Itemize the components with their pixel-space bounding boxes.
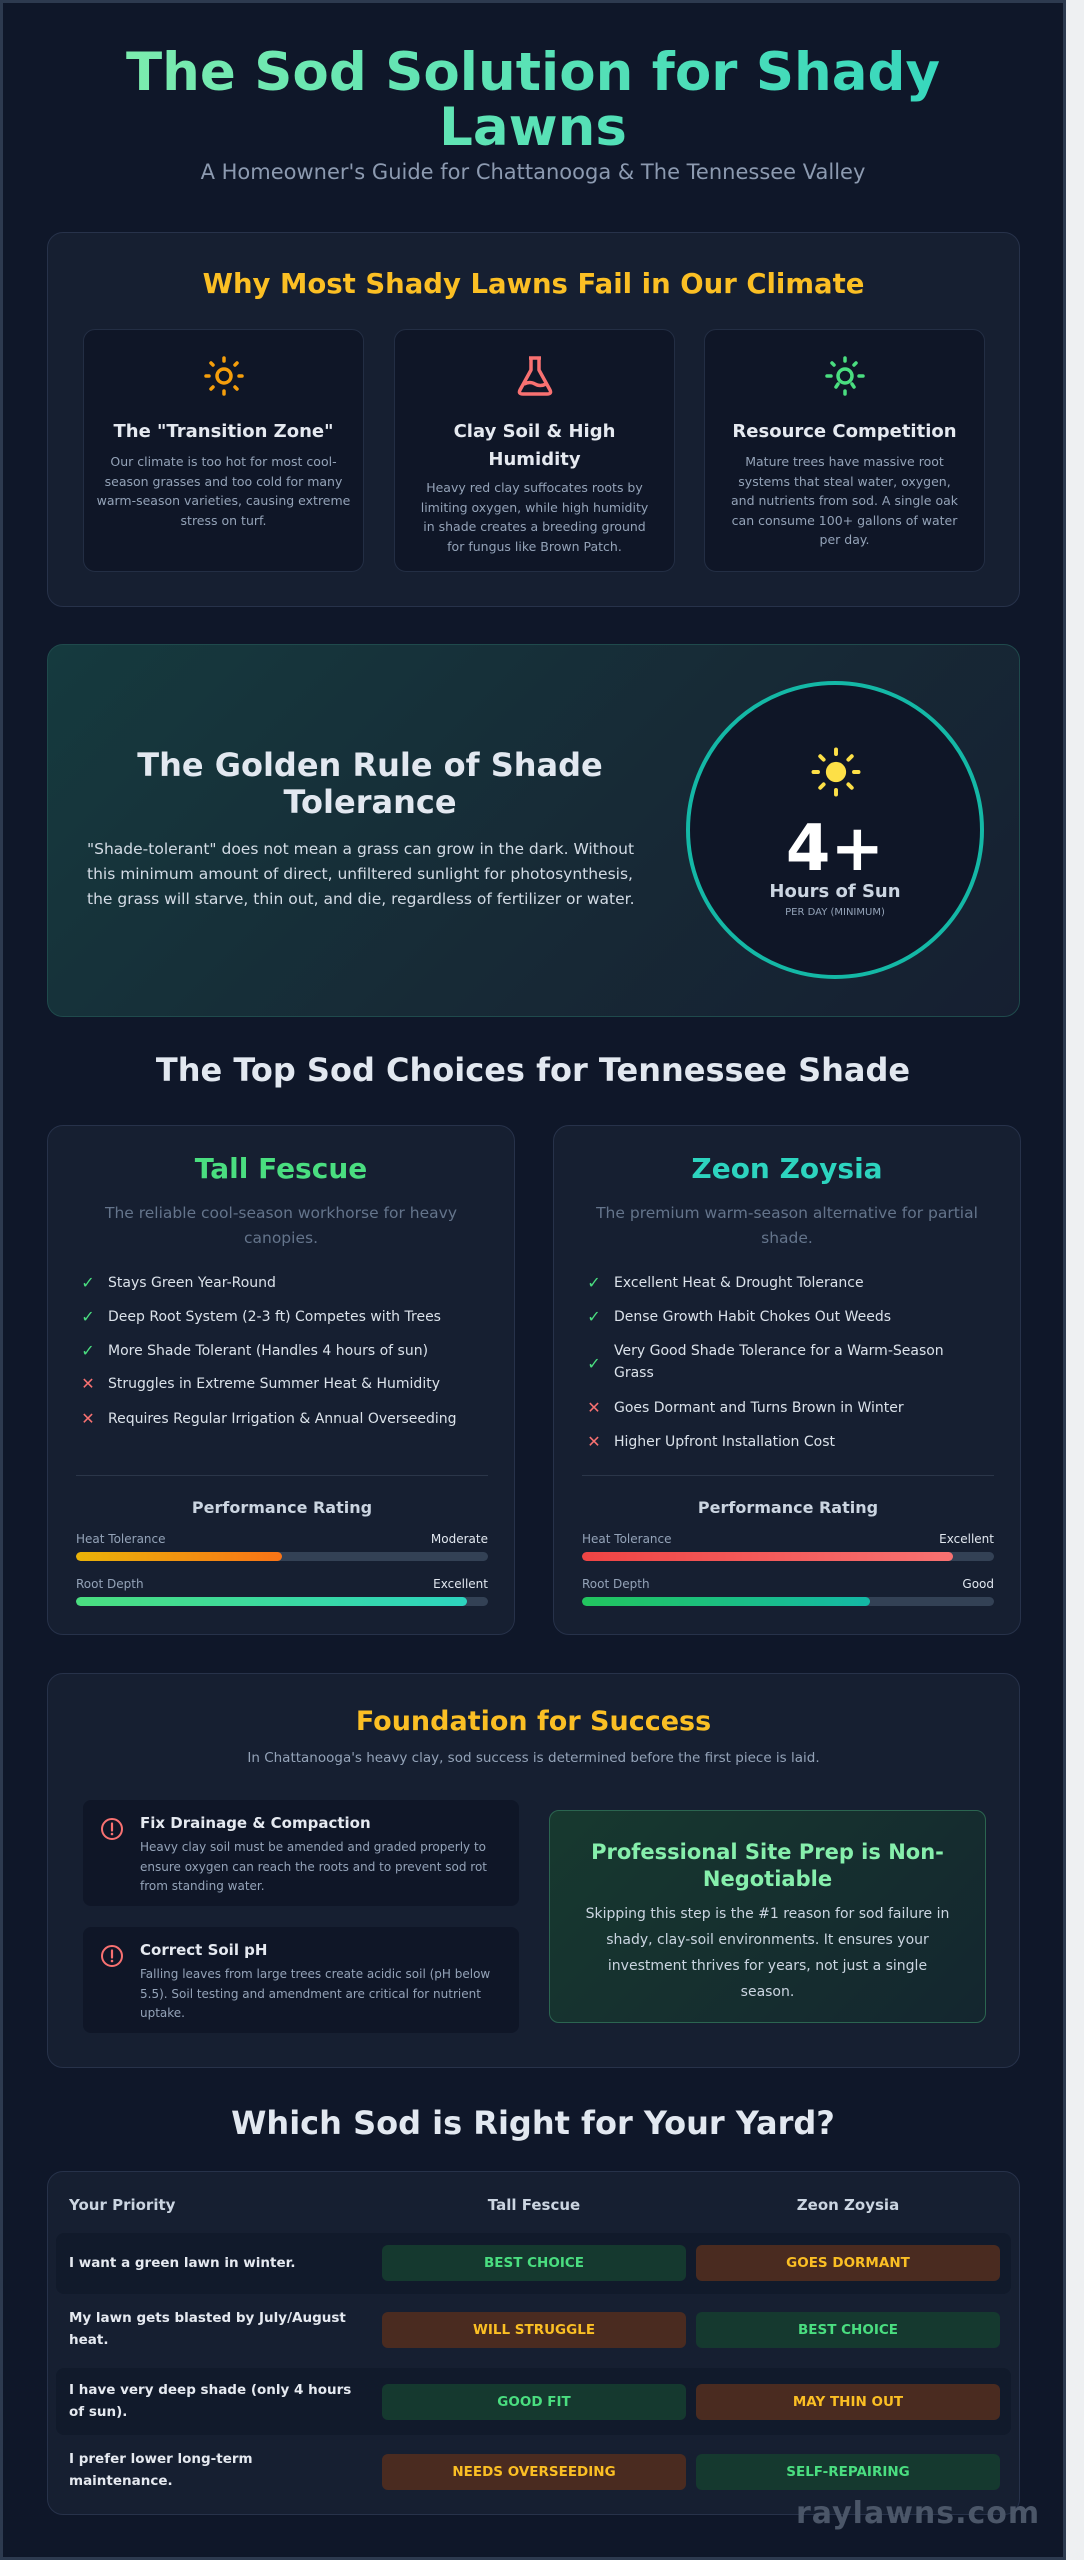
card: resource competition: Mature trees have massive root systems that steal water, oxygen, and nutrients from sod. A single oak can consume 100+ gallons of water per day. xyxy=(731,454,958,547)
icon: sun xyxy=(812,748,860,796)
row: green lawn in winter: I want a green lawn in winter. xyxy=(69,2255,295,2271)
panel: golden rule xyxy=(47,644,1020,1017)
panel: foundation for success: In Chattanooga's heavy clay, sod success is determined before the first piece is laid. xyxy=(247,1750,820,1766)
list: zoysia pros/cons: ✕ xyxy=(587,1398,601,1417)
chart: zoysia performance xyxy=(582,1498,994,1606)
list: fescue pros/cons: Deep Root System (2-3 ft) Competes with Trees xyxy=(108,1309,441,1325)
list: zoysia pros/cons: Excellent Heat & Drought Tolerance xyxy=(614,1275,864,1291)
text: golden rule: "Shade-tolerant" does not mean a grass can grow in the dark. Without this minimum amount of direct, unfiltered sunlight for photosynthesis, the grass will starve, thin out, and die, regardless of fertilizer or water. xyxy=(87,840,634,908)
heading: golden rule: The Golden Rule of Shade xyxy=(137,746,603,784)
card: transition zone xyxy=(83,329,364,572)
chart: zoysia performance: Good xyxy=(962,1577,994,1591)
icon: sun xyxy=(204,356,244,396)
row: deep shade: I have very deep shade (only 4 hours of sun). xyxy=(69,2382,351,2420)
list: fescue pros/cons: ✓ xyxy=(81,1307,95,1326)
callout: professional site prep: Professional Site Prep is Non-Negotiable xyxy=(591,1840,944,1891)
heading: top sod choices: The Top Sod Choices for Tennessee Shade xyxy=(156,1051,910,1089)
panel: foundation for success xyxy=(47,1673,1020,2068)
card: resource competition: Resource Competition xyxy=(732,421,957,442)
chart: fescue performance xyxy=(76,1498,488,1606)
panel: tall fescue: The reliable cool-season workhorse for heavy canopies. xyxy=(105,1204,457,1247)
item: soil pH: Falling leaves from large trees create acidic soil (pH below 5.5). Soil testing and amendment are critical for nutrient uptake. xyxy=(140,1967,490,2020)
card: clay soil: Heavy red clay suffocates roots by limiting oxygen, while high humidity in shade creates a breeding ground for fungus like Brown Patch. xyxy=(421,480,648,554)
row: green lawn in winter: GOES DORMANT xyxy=(786,2255,910,2271)
heading: why fail: Why Most Shady Lawns Fail in Our Climate xyxy=(203,268,864,300)
chart: zoysia performance: Excellent xyxy=(939,1532,994,1546)
table: sod comparison: Zeon Zoysia xyxy=(797,2196,899,2214)
list: fescue pros/cons: ✕ xyxy=(81,1374,95,1393)
icon: alert xyxy=(101,1945,123,1967)
panel: why lawns fail xyxy=(47,232,1020,607)
panel: foundation for success: Foundation for Success xyxy=(356,1706,711,1737)
row: green lawn in winter: BEST CHOICE xyxy=(484,2255,584,2271)
chart: fescue performance: Performance Rating xyxy=(192,1498,372,1517)
item: drainage xyxy=(83,1800,519,1906)
row: summer heat xyxy=(69,2310,1000,2348)
title: The Sod Solution for Shady xyxy=(126,42,940,103)
callout: 4+ hours of sun: Hours of Sun xyxy=(769,881,901,902)
card: clay soil: Humidity xyxy=(488,449,581,470)
watermark: raylawns.com xyxy=(796,2496,1040,2531)
chart: zoysia performance: Root Depth xyxy=(582,1577,650,1591)
list: zoysia pros/cons: ✕ xyxy=(587,1432,601,1451)
table: sod comparison: Tall Fescue xyxy=(488,2196,580,2214)
list: zoysia pros/cons xyxy=(587,1273,944,1451)
list: fescue pros/cons xyxy=(81,1273,457,1428)
chart: fescue performance: Heat Tolerance xyxy=(76,1532,166,1546)
panel: zeon zoysia: The premium warm-season alternative for partial shade. xyxy=(596,1204,978,1247)
list: zoysia pros/cons: ✓ xyxy=(587,1354,601,1373)
callout: professional site prep: Skipping this step is the #1 reason for sod failure in shady, clay-soil environments. It ensures your investment thrives for years, not just a single season. xyxy=(586,1906,949,2000)
callout: professional site prep xyxy=(549,1810,986,2023)
list: fescue pros/cons: ✓ xyxy=(81,1341,95,1360)
item: drainage: Heavy clay soil must be amended and graded properly to ensure oxygen can reach the roots and to prevent sod rot from standing water. xyxy=(140,1840,487,1893)
callout: 4+ hours of sun: PER DAY (MINIMUM) xyxy=(785,907,885,918)
row: deep shade: MAY THIN OUT xyxy=(793,2394,903,2410)
panel: tall fescue xyxy=(47,1125,515,1635)
list: fescue pros/cons: Stays Green Year-Round xyxy=(108,1275,276,1291)
row: summer heat: BEST CHOICE xyxy=(798,2322,898,2338)
row: maintenance: SELF-REPAIRING xyxy=(786,2464,910,2480)
list: zoysia pros/cons: Goes Dormant and Turns Brown in Winter xyxy=(614,1400,904,1416)
list: fescue pros/cons: ✕ xyxy=(81,1409,95,1428)
heading: golden rule xyxy=(137,746,603,821)
title xyxy=(0,45,1066,155)
callout: 4+ hours of sun: 4+ xyxy=(786,812,884,886)
card: clay soil: Clay Soil & High xyxy=(454,421,615,442)
item: soil pH xyxy=(83,1927,519,2033)
chart: fescue performance: Moderate xyxy=(431,1532,488,1546)
row: maintenance xyxy=(69,2451,1000,2490)
list: zoysia pros/cons: ✓ xyxy=(587,1307,601,1326)
row: deep shade: GOOD FIT xyxy=(497,2394,571,2410)
panel: zeon zoysia xyxy=(553,1125,1021,1635)
list: fescue pros/cons: More Shade Tolerant (Handles 4 hours of sun) xyxy=(108,1343,428,1359)
chart: zoysia performance: Heat Tolerance xyxy=(582,1532,672,1546)
chart: fescue performance: Root Depth xyxy=(76,1577,144,1591)
icon: flask xyxy=(518,356,552,396)
item: soil pH: Correct Soil pH xyxy=(140,1941,267,1959)
title: Lawns xyxy=(439,97,627,158)
icon: plant xyxy=(825,356,865,396)
subtitle: A Homeowner's Guide for Chattanooga & The Tennessee Valley xyxy=(201,160,865,184)
list: zoysia pros/cons: Higher Upfront Installation Cost xyxy=(614,1434,835,1450)
heading: golden rule: Tolerance xyxy=(283,783,457,821)
card: clay soil xyxy=(394,329,675,572)
row: maintenance: NEEDS OVERSEEDING xyxy=(452,2464,616,2480)
chart: zoysia performance: Performance Rating xyxy=(698,1498,878,1517)
list: zoysia pros/cons: Dense Growth Habit Chokes Out Weeds xyxy=(614,1309,891,1325)
heading: which sod: Which Sod is Right for Your Yard? xyxy=(231,2104,835,2142)
callout: 4+ hours of sun xyxy=(686,681,984,979)
list: fescue pros/cons: ✓ xyxy=(81,1273,95,1292)
row: summer heat: My lawn gets blasted by July/August heat. xyxy=(69,2310,346,2348)
list: zoysia pros/cons: Very Good Shade Tolerance for a Warm-Season Grass xyxy=(614,1343,944,1381)
chart: fescue performance: Excellent xyxy=(433,1577,488,1591)
panel: tall fescue: Tall Fescue xyxy=(195,1152,367,1185)
row: deep shade xyxy=(69,2382,1000,2420)
card: resource competition xyxy=(704,329,985,572)
list: fescue pros/cons: Requires Regular Irrigation & Annual Overseeding xyxy=(108,1411,457,1427)
row: summer heat: WILL STRUGGLE xyxy=(473,2322,595,2338)
card: transition zone: Our climate is too hot for most cool-season grasses and too cold for many warm-season varieties, causing extreme stress on turf. xyxy=(97,454,350,528)
table: sod comparison: Your Priority xyxy=(69,2196,175,2214)
icon: alert xyxy=(101,1818,123,1840)
row: maintenance: I prefer lower long-term maintenance. xyxy=(69,2451,253,2489)
row: green lawn in winter xyxy=(69,2245,1000,2281)
card: transition zone: The "Transition Zone" xyxy=(113,421,334,442)
item: drainage: Fix Drainage & Compaction xyxy=(140,1814,371,1832)
panel: zeon zoysia: Zeon Zoysia xyxy=(691,1152,883,1185)
list: fescue pros/cons: Struggles in Extreme Summer Heat & Humidity xyxy=(108,1376,440,1392)
list: zoysia pros/cons: ✓ xyxy=(587,1273,601,1292)
table: sod comparison xyxy=(47,2171,1020,2515)
